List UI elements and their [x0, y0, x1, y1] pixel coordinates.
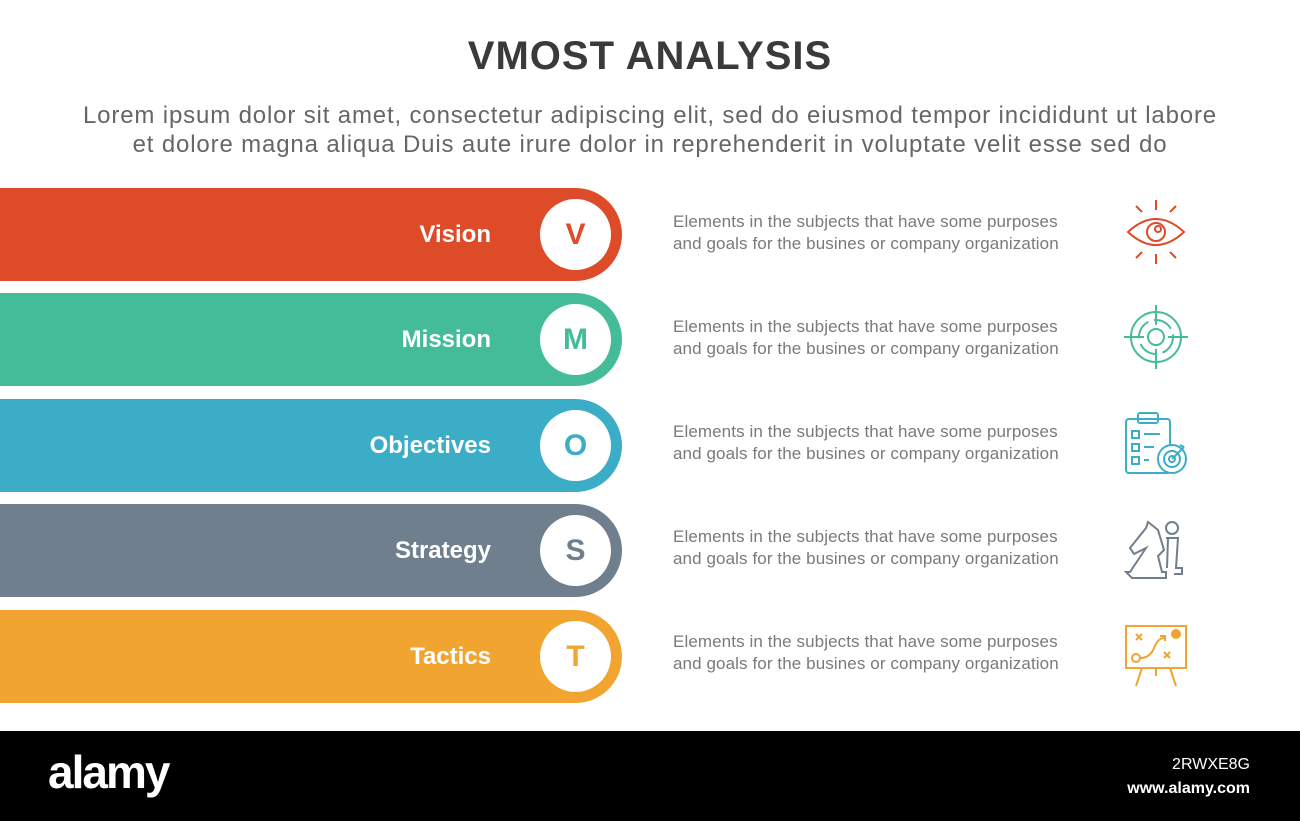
bar: mission: Mission [402, 326, 491, 353]
footer logo: alamy [48, 746, 168, 798]
bar: mission: M [563, 323, 588, 356]
text: vision: Elements in the subjects that have some purposes [673, 212, 1058, 231]
text: vision: and goals for the busines or company organization [673, 234, 1059, 253]
bar: objectives: Objectives [370, 432, 491, 459]
text: vision [673, 212, 1059, 253]
footer band [0, 731, 1300, 821]
bar: vision: V [565, 218, 586, 251]
footer id: www.alamy.com [1127, 780, 1250, 797]
bar: tactics [0, 610, 622, 703]
text: mission [673, 317, 1059, 358]
bar: mission [0, 293, 622, 386]
icon: target [1124, 305, 1188, 369]
bar: vision: Vision [419, 221, 491, 248]
icon: clipboard [1125, 412, 1187, 474]
text: mission: and goals for the busines or company organization [673, 339, 1059, 358]
text: strategy: and goals for the busines or company organization [673, 549, 1059, 568]
text: objectives: Elements in the subjects that have some purposes [673, 422, 1058, 441]
subtitle: et dolore magna aliqua Duis aute irure dolor in reprehenderit in voluptate velit esse sed do [133, 131, 1167, 158]
footer id: 2RWXE8G [1172, 756, 1250, 773]
subtitle [83, 102, 1217, 158]
icon: chess [1124, 520, 1183, 579]
text: strategy [673, 527, 1059, 568]
text: tactics [673, 632, 1059, 673]
icon: board [1125, 625, 1187, 686]
text: objectives: and goals for the busines or company organization [673, 444, 1059, 463]
bar: tactics: Tactics [410, 643, 491, 670]
bar: strategy [0, 504, 622, 597]
bar: objectives [0, 399, 622, 492]
bar: objectives: O [564, 429, 587, 462]
subtitle: Lorem ipsum dolor sit amet, consectetur adipiscing elit, sed do eiusmod tempor incididunt ut labore [83, 102, 1217, 129]
text: objectives [673, 422, 1059, 463]
bar: tactics: T [566, 640, 585, 673]
text: mission: Elements in the subjects that have some purposes [673, 317, 1058, 336]
footer id [1127, 756, 1250, 797]
bar: vision [0, 188, 622, 281]
bar: strategy: S [565, 534, 586, 567]
text: tactics: and goals for the busines or company organization [673, 654, 1059, 673]
title: VMOST ANALYSIS [468, 34, 832, 78]
bar: strategy: Strategy [395, 537, 491, 564]
text: strategy: Elements in the subjects that have some purposes [673, 527, 1058, 546]
text: tactics: Elements in the subjects that have some purposes [673, 632, 1058, 651]
icon: eye [1126, 200, 1186, 264]
